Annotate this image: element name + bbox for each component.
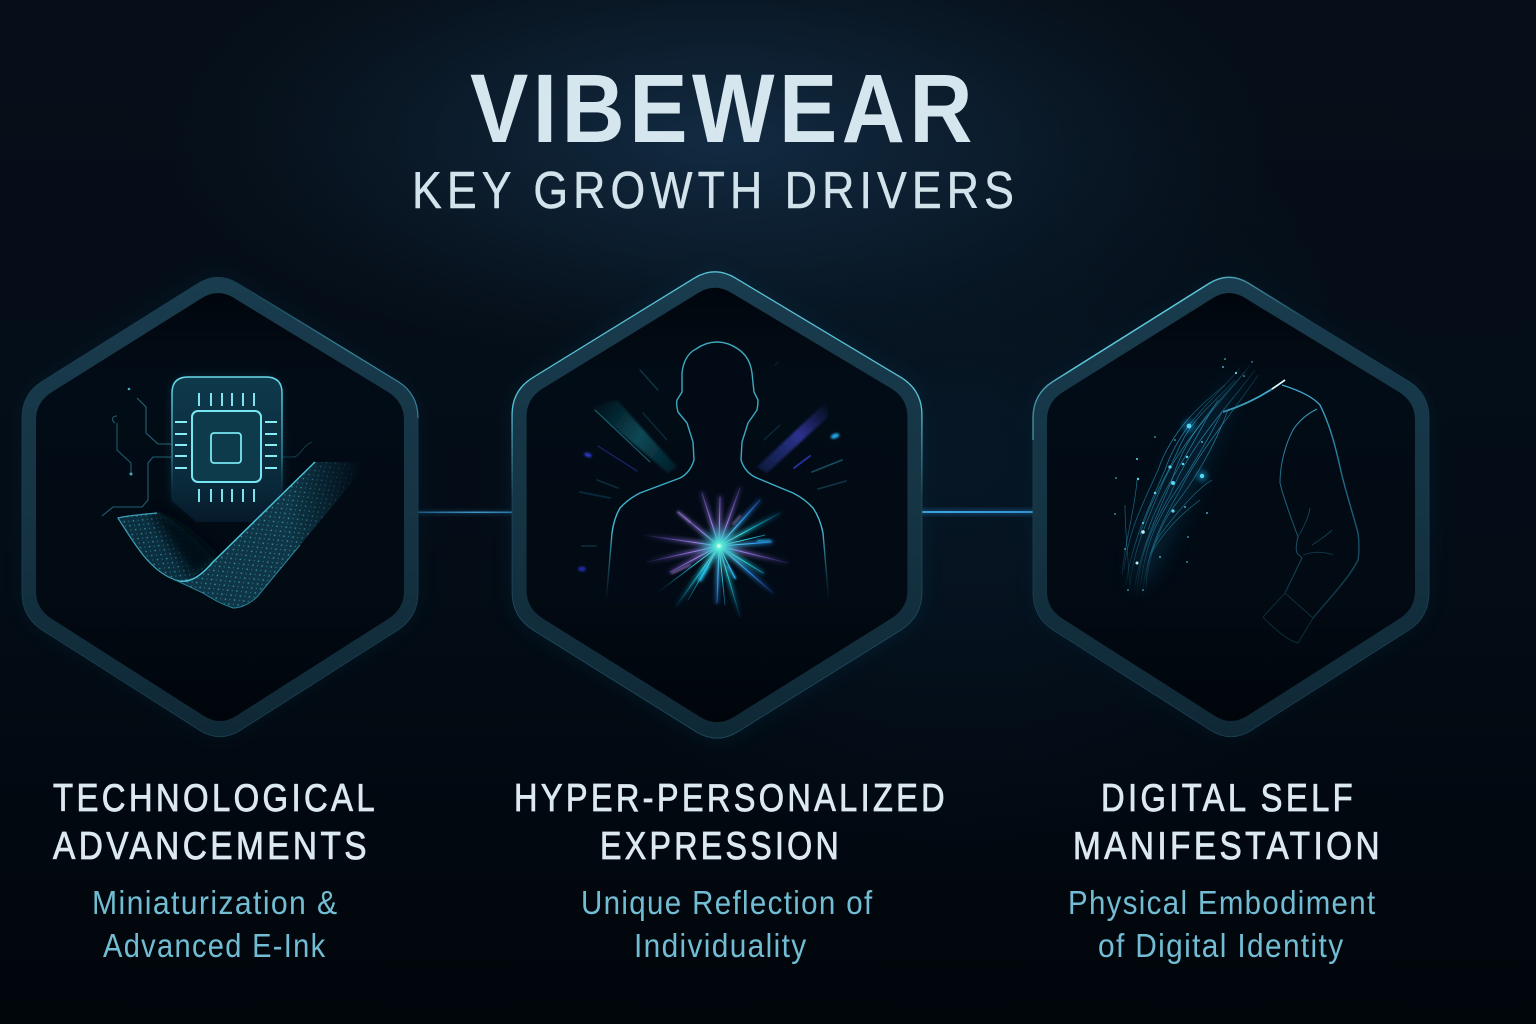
icon: person silhouette with energy burst bbox=[578, 342, 868, 617]
description: miniaturization bbox=[92, 884, 338, 964]
subtitle: KEY GROWTH DRIVERS bbox=[412, 162, 1019, 220]
chip core bbox=[192, 411, 261, 482]
description: physical embodiment: Physical Embodiment bbox=[1068, 884, 1376, 921]
icon: sweater sleeve dissolving into light fibres bbox=[1114, 358, 1359, 643]
glowing particles bbox=[1114, 358, 1253, 591]
panel: hyper-personalized expression hexagon bbox=[512, 272, 922, 738]
description: physical embodiment: of Digital Identity bbox=[1098, 927, 1344, 964]
connector: technological to personalized bbox=[418, 510, 514, 515]
label: digital self manifestation bbox=[1073, 777, 1383, 868]
chip body bbox=[172, 377, 282, 522]
description: unique reflection bbox=[581, 884, 874, 964]
light fibres bbox=[1122, 365, 1258, 600]
description: unique reflection: Unique Reflection of bbox=[581, 884, 874, 921]
chip pins bbox=[175, 393, 277, 502]
sweater outline bbox=[1223, 380, 1359, 643]
label: hyper-personalized expression: EXPRESSION bbox=[600, 825, 842, 868]
ribbon front strip bbox=[173, 462, 364, 608]
label: technological advancements: TECHNOLOGICAL bbox=[53, 777, 378, 820]
description: miniaturization: Advanced E-Ink bbox=[103, 927, 326, 964]
ribbon back strip bbox=[118, 512, 215, 581]
label: technological advancements: ADVANCEMENTS bbox=[53, 825, 370, 868]
label: digital self manifestation: MANIFESTATION bbox=[1073, 825, 1383, 868]
chip glow bbox=[172, 377, 282, 507]
label: hyper-personalized expression: HYPER-PERSONALIZED bbox=[514, 777, 948, 820]
description: physical embodiment bbox=[1068, 884, 1376, 964]
sparks bbox=[578, 432, 840, 571]
title: VIBEWEAR bbox=[470, 54, 977, 163]
connector: personalized to digital self bbox=[920, 509, 1036, 515]
side streaks bbox=[578, 362, 868, 546]
burst rays bbox=[643, 488, 788, 617]
label: technological advancements bbox=[53, 777, 378, 868]
label: digital self manifestation: DIGITAL SELF bbox=[1101, 777, 1356, 820]
description: miniaturization: Miniaturization & bbox=[92, 884, 338, 921]
icon: microchip with flexible e-ink ribbon bbox=[102, 377, 364, 608]
description: unique reflection: Individuality bbox=[634, 927, 808, 964]
person outline bbox=[606, 342, 829, 603]
circuit traces bbox=[102, 388, 312, 516]
panel: technological advancements hexagon bbox=[22, 277, 418, 737]
panel: digital self manifestation hexagon bbox=[1033, 277, 1429, 737]
burst glow bbox=[643, 488, 788, 617]
fibre glow bbox=[1130, 370, 1245, 590]
side light bands bbox=[590, 400, 677, 473]
label: hyper-personalized expression bbox=[514, 777, 948, 868]
burst core bbox=[695, 522, 743, 570]
